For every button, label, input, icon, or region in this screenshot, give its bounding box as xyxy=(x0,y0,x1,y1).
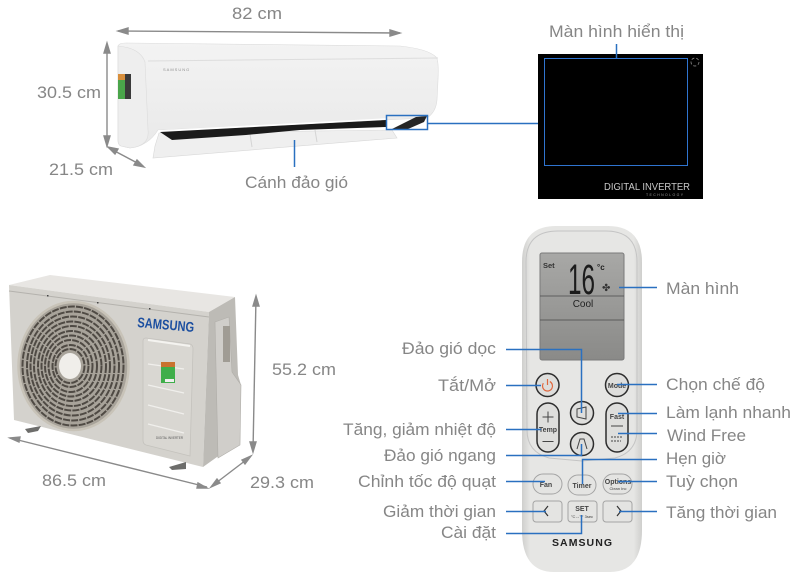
callouts: left side: Tăng, giảm nhiệt độ xyxy=(343,420,496,439)
panel: display close-up xyxy=(538,22,703,199)
button: set: °C↔°F 3sec xyxy=(571,514,593,519)
callouts: right side: Wind Free xyxy=(667,426,746,445)
button: options: Options xyxy=(605,479,631,486)
dimension: outdoor depth 29.3 cm: 29.3 cm xyxy=(250,473,314,492)
feet xyxy=(25,426,186,470)
button: set: SET xyxy=(575,506,590,513)
callouts: left side: Giảm thời gian xyxy=(383,502,496,521)
outdoor unit xyxy=(9,275,241,470)
energy label xyxy=(118,74,125,99)
callout: flap xyxy=(245,140,348,192)
energy label xyxy=(161,362,175,383)
callouts: left side: Chỉnh tốc độ quạt xyxy=(358,472,496,491)
outdoor unit: DIGITAL INVERTER xyxy=(156,436,183,440)
button: timer: Timer xyxy=(573,483,592,490)
callouts: right side: Tuỳ chọn xyxy=(666,472,738,491)
button: fan: Fan xyxy=(540,482,552,489)
LCD screen: Set xyxy=(543,261,555,270)
button: set xyxy=(568,501,597,522)
button: decrease xyxy=(533,501,562,522)
button: fast and wind free: Fast xyxy=(610,414,625,421)
button: horizontal swing xyxy=(570,432,594,456)
fan symbol: ✤ xyxy=(602,283,610,294)
front panel xyxy=(143,338,193,456)
callouts: right side: Hẹn giờ xyxy=(666,449,726,468)
LCD screen: Cool xyxy=(573,299,593,310)
dimension: outdoor width 86.5 cm: 86.5 cm xyxy=(42,471,106,490)
callouts: left side: Tắt/Mở xyxy=(438,376,496,395)
callouts: left side: Đảo gió ngang xyxy=(384,446,496,465)
callouts: right side: Tăng thời gian xyxy=(666,503,777,522)
dimension: indoor depth 21.5 cm xyxy=(49,147,144,179)
air flap xyxy=(153,130,397,158)
brand mark: SAMSUNG xyxy=(163,67,190,72)
button: mode xyxy=(606,374,628,396)
brand text: Digital Inverter: DIGITAL INVERTER xyxy=(604,182,690,193)
dimension: outdoor width 86.5 cm xyxy=(10,437,207,490)
vent opening xyxy=(160,120,386,140)
button: increase xyxy=(603,501,632,522)
dimension: indoor width 82 cm: 82 cm xyxy=(232,4,282,23)
button: temperature xyxy=(537,403,559,452)
callouts: right side xyxy=(582,279,791,522)
dimension: indoor width 82 cm xyxy=(118,4,400,36)
label: display: Màn hình hiển thị xyxy=(549,22,684,41)
dimension: outdoor height 55.2 cm xyxy=(250,296,336,452)
dimension: indoor depth 21.5 cm: 21.5 cm xyxy=(49,160,113,179)
dimension: indoor height 30.5 cm xyxy=(37,43,110,146)
brand logo: SAMSUNG xyxy=(552,537,612,549)
LCD screen: 16 xyxy=(568,256,595,304)
button: fan xyxy=(533,474,562,494)
LCD screen xyxy=(540,253,624,360)
button: options xyxy=(603,474,632,494)
indoor unit xyxy=(118,43,438,158)
LCD screen: °c xyxy=(597,263,605,272)
dimension: outdoor depth 29.3 cm xyxy=(211,456,314,492)
dimension: outdoor height 55.2 cm: 55.2 cm xyxy=(272,360,336,379)
remote control xyxy=(522,226,642,572)
fan grille xyxy=(18,302,128,430)
brand logo: SAMSUNG xyxy=(137,314,195,335)
callouts: right side: Làm lạnh nhanh xyxy=(666,403,791,422)
bolts xyxy=(47,295,150,310)
button: timer xyxy=(568,475,596,495)
button: power xyxy=(536,374,559,396)
panel: display close-up: TECHNOLOGY xyxy=(646,193,685,197)
dimension: indoor height 30.5 cm: 30.5 cm xyxy=(37,83,101,102)
button: mode: Mode xyxy=(608,383,626,390)
button: vertical swing xyxy=(570,402,594,424)
callouts: right side: Màn hình xyxy=(666,279,739,298)
callouts: left side xyxy=(343,339,582,542)
callout: display zoom connector xyxy=(386,116,538,130)
callouts: left side: Cài đặt xyxy=(441,523,496,542)
callouts: left side: Đảo gió dọc xyxy=(402,339,497,358)
button: temperature: Temp xyxy=(539,427,557,434)
button: fast and wind free xyxy=(606,403,628,452)
button: options: Clean Inc xyxy=(610,486,626,491)
callouts: right side: Chọn chế độ xyxy=(666,375,765,394)
callout: flap: Cánh đảo gió xyxy=(245,173,348,192)
valve cover xyxy=(215,317,241,458)
